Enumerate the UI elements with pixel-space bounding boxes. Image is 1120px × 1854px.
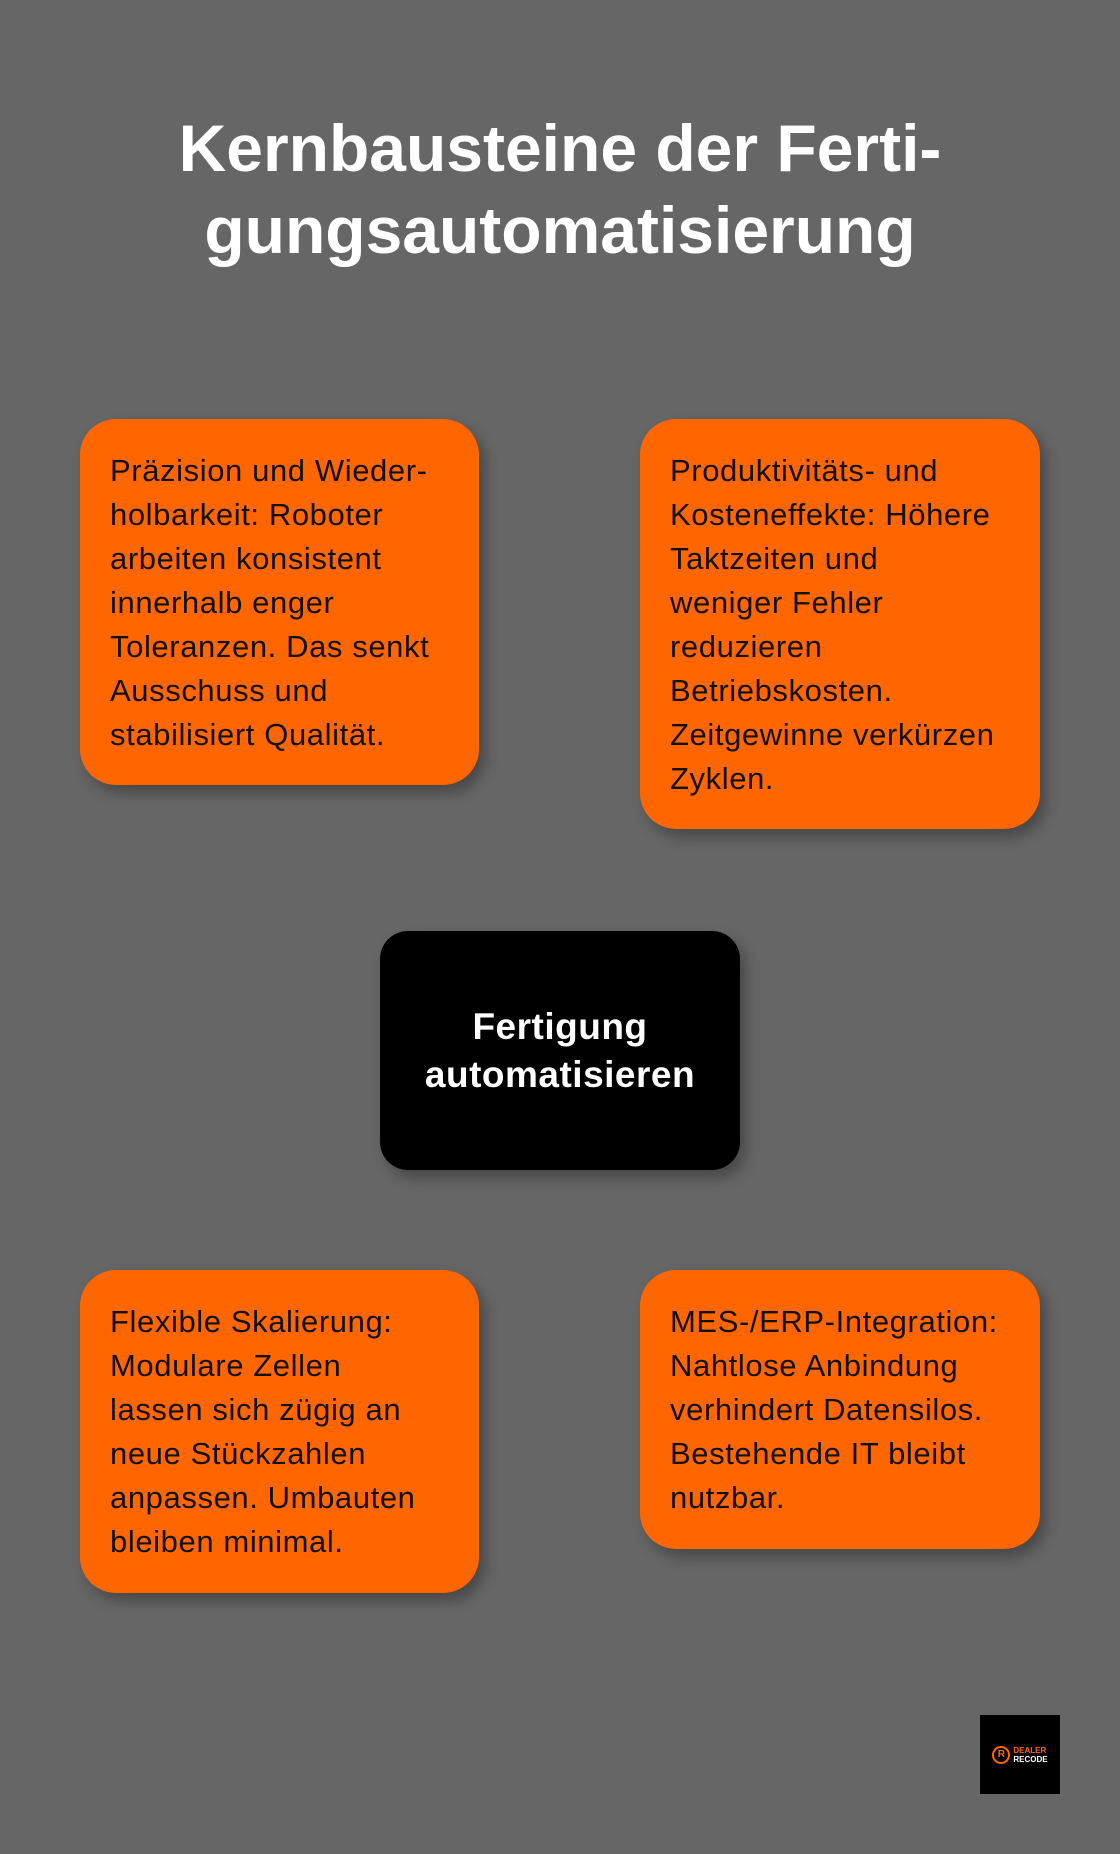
logo xyxy=(980,1715,1060,1794)
panel: productivity: reduzieren xyxy=(670,629,822,664)
title xyxy=(179,111,941,267)
panel: precision: Toleranzen. Das senkt xyxy=(110,629,429,664)
center: Fertigung automatisieren: automatisieren xyxy=(425,1054,695,1094)
panel: integration: verhindert Datensilos. xyxy=(670,1392,983,1427)
panel: precision: Präzision und Wieder- xyxy=(110,453,428,488)
panel: scaling: anpassen. Umbauten xyxy=(110,1480,416,1515)
title: gungsautomatisierung xyxy=(204,193,916,267)
logo: DEALER xyxy=(1013,1746,1046,1754)
panel: precision: Ausschuss und xyxy=(110,673,328,708)
panel: precision xyxy=(80,419,479,785)
center: Fertigung automatisieren: Fertigung xyxy=(472,1006,648,1046)
panel: integration: MES-/ERP-Integration: xyxy=(670,1304,998,1339)
panel: integration: nutzbar. xyxy=(670,1480,785,1515)
panel: integration xyxy=(640,1270,1040,1549)
panel: scaling: neue Stückzahlen xyxy=(110,1436,366,1471)
panel: precision: arbeiten konsistent xyxy=(110,541,382,576)
panel: scaling: bleiben minimal. xyxy=(110,1524,344,1559)
panel: productivity: Kosteneffekte: Höhere xyxy=(670,497,991,532)
panel: productivity: Taktzeiten und xyxy=(670,541,878,576)
center: Fertigung automatisieren xyxy=(380,931,740,1170)
panel: precision: stabilisiert Qualität. xyxy=(110,717,385,752)
panel: productivity xyxy=(640,419,1040,829)
panel: scaling: Modulare Zellen xyxy=(110,1348,341,1383)
panel: productivity: Betriebskosten. xyxy=(670,673,893,708)
panel: productivity: Produktivitäts- und xyxy=(670,453,938,488)
panel: productivity: weniger Fehler xyxy=(670,585,883,620)
panel: precision: holbarkeit: Roboter xyxy=(110,497,383,532)
logo: R xyxy=(998,1748,1005,1760)
title: Kernbausteine der Ferti- xyxy=(179,111,941,185)
panel: scaling: Flexible Skalierung: xyxy=(110,1304,393,1339)
panel: integration: Bestehende IT bleibt xyxy=(670,1436,966,1471)
panel: productivity: Zyklen. xyxy=(670,761,774,796)
logo: RECODE xyxy=(1013,1754,1048,1764)
panel: integration: Nahtlose Anbindung xyxy=(670,1348,958,1383)
panel: precision: innerhalb enger xyxy=(110,585,334,620)
panel: scaling xyxy=(80,1270,479,1593)
panel: scaling: lassen sich zügig an xyxy=(110,1392,401,1427)
panel: productivity: Zeitgewinne verkürzen xyxy=(670,717,994,752)
